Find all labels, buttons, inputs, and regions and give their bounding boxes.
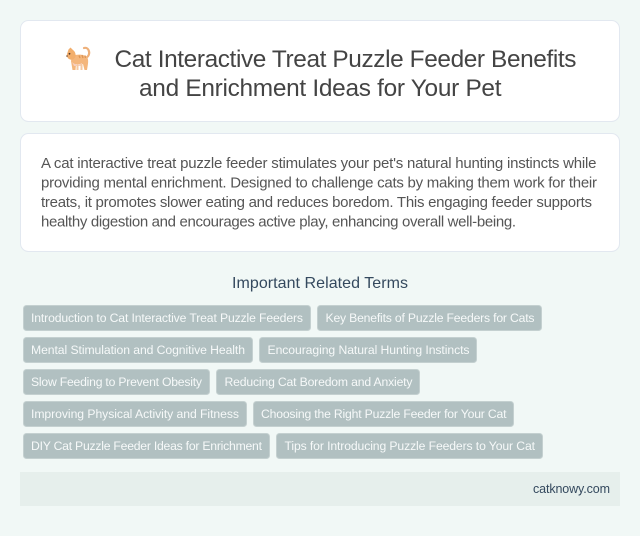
- description text: providing mental enrichment. Designed to challenge cats by making them work for their: [41, 174, 597, 192]
- tag: [216, 370, 420, 394]
- tag: Slow Feeding to Prevent Obesity: [31, 375, 203, 389]
- tag: [24, 338, 252, 362]
- description text: [41, 155, 597, 230]
- tag: Reducing Cat Boredom and Anxiety: [224, 375, 413, 389]
- tag: Tips for Introducing Puzzle Feeders to Your Cat: [284, 439, 536, 453]
- tag: [24, 370, 210, 394]
- footer bar: [20, 472, 620, 506]
- icon: orange cat: [66, 48, 89, 70]
- tag: [24, 306, 310, 330]
- panel: description card: [20, 134, 620, 252]
- tag: [254, 402, 514, 426]
- tag: Introduction to Cat Interactive Treat Puzzle Feeders: [31, 311, 303, 325]
- tag: DIY Cat Puzzle Feeder Ideas for Enrichment: [31, 439, 263, 453]
- tag: [260, 338, 476, 362]
- tag: Choosing the Right Puzzle Feeder for Your Cat: [261, 407, 507, 421]
- tag: Improving Physical Activity and Fitness: [31, 407, 239, 421]
- tag: [318, 306, 542, 330]
- tag: [24, 434, 270, 458]
- title text: Cat Interactive Treat Puzzle Feeder Benefits: [114, 46, 576, 73]
- tag: [24, 402, 246, 426]
- tag: [276, 434, 542, 458]
- description text: treats, it promotes slower eating and reduces boredom. This engaging feeder supports: [41, 194, 592, 211]
- panel: related term tags: [24, 306, 542, 458]
- tag: Mental Stimulation and Cognitive Health: [31, 343, 245, 357]
- title text: and Enrichment Ideas for Your Pet: [139, 75, 502, 102]
- tag: Key Benefits of Puzzle Feeders for Cats: [326, 311, 534, 325]
- tag: Encouraging Natural Hunting Instincts: [268, 343, 470, 357]
- panel: title card: [20, 20, 620, 122]
- title text: [114, 46, 576, 102]
- description text: healthy digestion and encourages active play, enhancing overall well-being.: [41, 214, 516, 230]
- description text: A cat interactive treat puzzle feeder stimulates your pet's natural hunting instincts while: [41, 155, 596, 172]
- footer source text: catknowy.com: [533, 482, 610, 496]
- heading: important related terms: Important Related Terms: [232, 275, 408, 292]
